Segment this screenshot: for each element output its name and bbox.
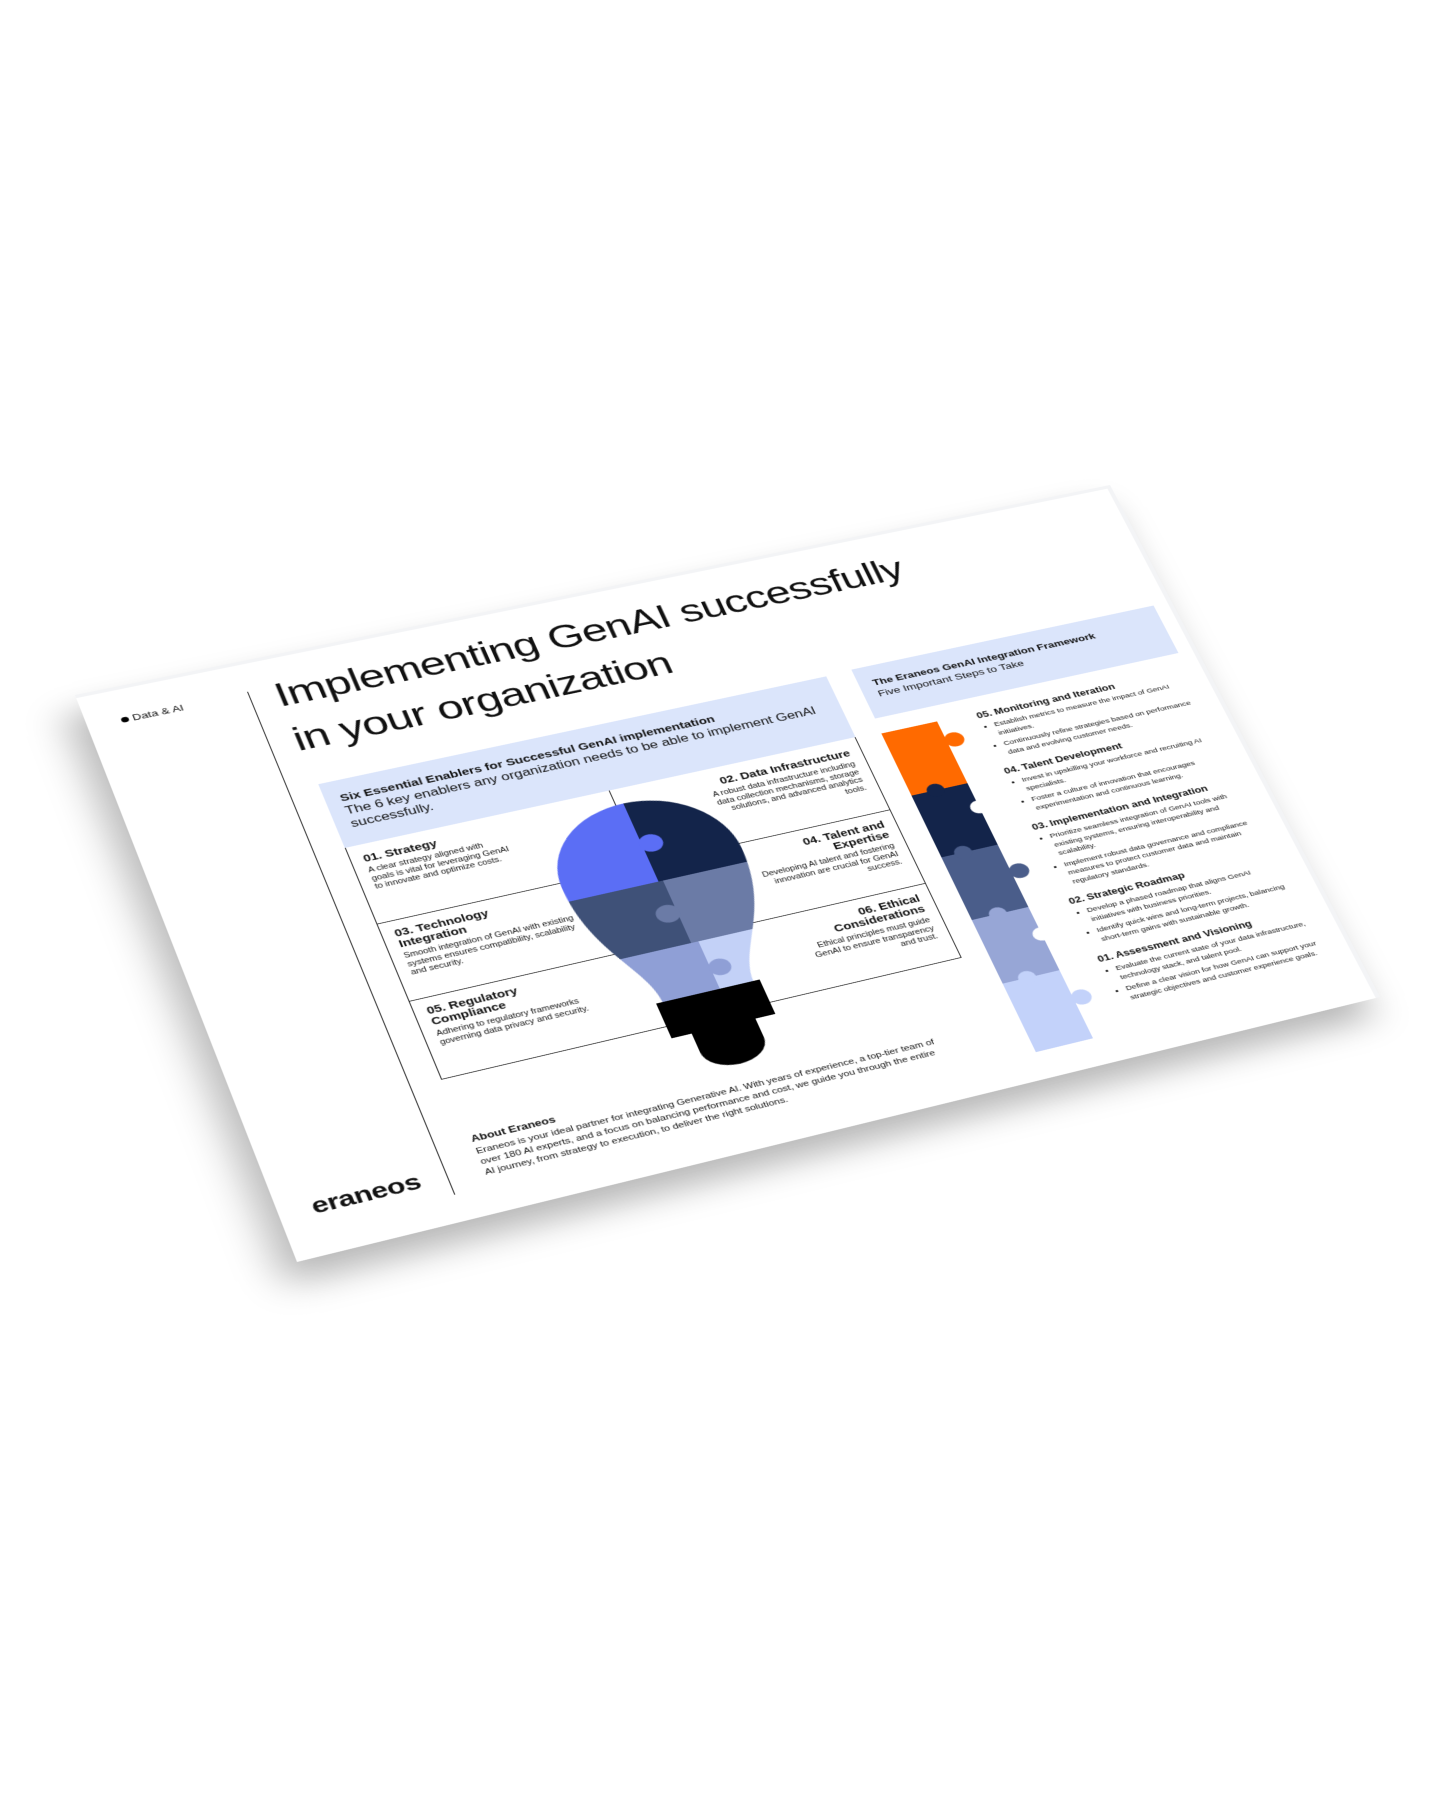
step 02: 02. Strategic Roadmap (1067, 871, 1187, 906)
sidebar divider (247, 692, 455, 1195)
step 01 (1096, 907, 1326, 1005)
step 05: Continuously refine strategies based on performance data and evolving customer needs. (1002, 699, 1192, 756)
step 02: Identify quick wins and long-term projects, balancing short-term gains with sustainable growth. (1095, 883, 1286, 943)
step 03 (1030, 777, 1266, 889)
about eraneos: Eraneos is your ideal partner for integrating Generative AI. With years of experience, a top-tier team of over 180 AI experts, and a focus on balancing performance and cost, we guide you through the entire AI journey, from strategy to execution, to deliver the right solutions. (475, 1038, 937, 1177)
framework steps (975, 668, 1330, 1014)
document sheet (75, 485, 1380, 1262)
grid frame (345, 737, 962, 1080)
panel header (318, 676, 855, 848)
step 05 (975, 668, 1200, 759)
enabler 05: 05. Regulatory (425, 985, 519, 1016)
enabler 01: 01. Strategy (361, 838, 439, 864)
panel header: The 6 key enablers any organization needs to be able to implement GenAI successfully. (343, 705, 818, 830)
step 04: Foster a culture of innovation that encourages experimentation and continuous learning. (1030, 760, 1196, 811)
step 04: Invest in upskilling your workforce and recruiting AI specialists. (1020, 737, 1203, 792)
step 03: Implement robust data governance and compliance measures to protect customer data and maintain regulatory standards. (1062, 819, 1249, 885)
enabler 05 (425, 970, 596, 1047)
step 01: Evaluate the current state of your data infrastructure, technology stack, and talent pool. (1114, 920, 1307, 981)
step 01: 01. Assessment and Visioning (1096, 919, 1254, 964)
icon: lightbulb puzzle (556, 800, 776, 1066)
enabler 04: Developing AI talent and fostering innovation are crucial for GenAI success. (761, 842, 904, 885)
panel header: Six Essential Enablers for Successful GenAI implementation (338, 714, 717, 804)
step 03: Prioritize seamless integration of GenAI tools with existing systems, ensuring interoperability and scalability. (1048, 793, 1229, 857)
enabler 01: A clear strategy aligned with goals is vital for leveraging GenAI to innovate and optimize costs. (367, 842, 510, 891)
enabler 05: Compliance (429, 999, 508, 1027)
about eraneos: About Eraneos (469, 1114, 557, 1144)
graphics layer (556, 721, 1093, 1066)
step 05: 05. Monitoring and Iteration (975, 682, 1117, 720)
step 02 (1067, 850, 1296, 947)
enabler 06: Considerations (832, 903, 927, 934)
enabler 03: Smooth integration of GenAI with existing systems ensures compatibility, scalability and security. (403, 915, 577, 977)
title: in your organization (287, 645, 678, 758)
step 05: Establish metrics to measure the impact of GenAI initiatives. (993, 683, 1171, 737)
step 01: Define a clear vision for how GenAI can support your strategic objectives and customer experience goals. (1124, 940, 1319, 1001)
logo: eraneos: eraneos (307, 1170, 425, 1219)
panel header: framework (851, 606, 1178, 719)
enabler 06: 06. Ethical (856, 893, 922, 917)
enabler 04: Expertise (831, 829, 891, 852)
enabler 04: 04. Talent and (801, 819, 886, 847)
step 04 (1002, 723, 1228, 815)
step 03: 03. Implementation and Integration (1030, 784, 1210, 832)
enabler 02: A robust data infrastructure including data collection mechanisms, storage solutions, and advanced analytics tools. (711, 761, 868, 812)
panel: six enablers (318, 676, 962, 1080)
enabler 01 (361, 824, 515, 892)
step 02: Develop a phased roadmap that aligns GenAI initiatives with business priorities. (1085, 869, 1252, 923)
panel: framework puzzle column (881, 718, 1110, 1052)
enabler 06: Ethical principles must guide GenAI to ensure transparency and trust. (814, 917, 939, 959)
panel header: framework: The Eraneos GenAI Integration Framework (871, 631, 1097, 687)
enabler 04 (750, 819, 904, 896)
enabler 02 (703, 748, 868, 824)
enabler 06 (793, 893, 940, 970)
enabler 03 (392, 888, 593, 978)
title: Implementing GenAI successfully (268, 551, 910, 714)
tag: Data & AI: Data & AI (131, 703, 185, 723)
enabler 03: 03. Technology (392, 907, 490, 939)
step 04: 04. Talent Development (1002, 741, 1124, 776)
panel header: framework: Five Important Steps to Take (876, 658, 1026, 698)
enabler 05: Adhering to regulatory frameworks governing data privacy and security. (435, 998, 590, 1046)
enabler 02: 02. Data Infrastructure (717, 748, 852, 786)
enabler 03: Integration (397, 924, 469, 949)
